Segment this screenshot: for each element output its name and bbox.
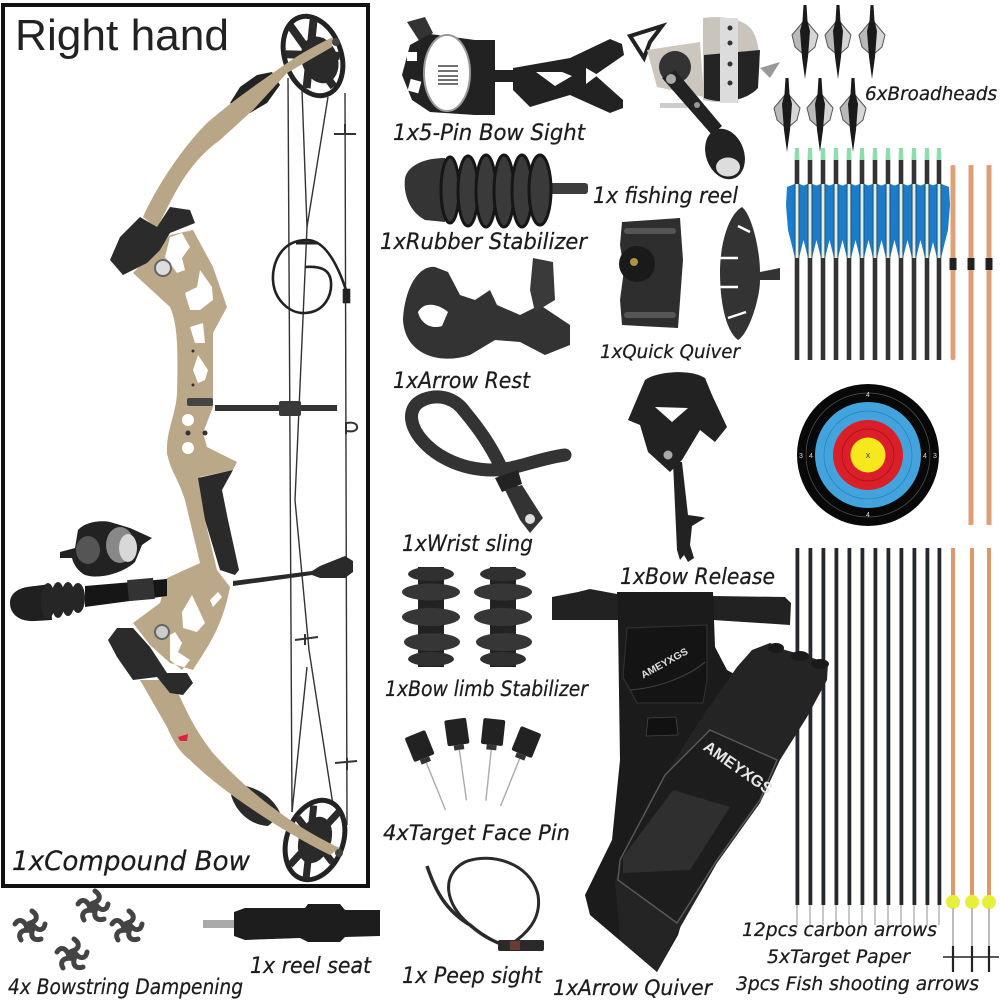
front stabilizer <box>85 579 167 607</box>
label: target paper: 5xTarget Paper <box>767 946 911 968</box>
shafts <box>794 148 942 360</box>
lower limb damper <box>231 786 281 826</box>
finger nubs <box>768 643 829 669</box>
icon: peep sight <box>427 858 544 951</box>
main bag <box>585 592 745 972</box>
label: wrist sling: 1xWrist sling <box>402 532 533 557</box>
label: arrow rest: 1xArrow Rest <box>393 369 531 394</box>
upper fish arrows <box>950 165 992 525</box>
label: fishing reel: 1x fishing reel <box>593 184 738 209</box>
label: compound bow: 1xCompound Bow <box>12 846 251 877</box>
lower fish arrows <box>943 548 999 972</box>
label: quick quiver: 1xQuick Quiver <box>600 341 741 363</box>
riser <box>133 230 237 670</box>
icon: bow release <box>628 372 727 562</box>
label: rubber stabilizer: 1xRubber Stabilizer <box>380 230 589 255</box>
upper limb <box>143 37 333 228</box>
icon: arrow quiver <box>552 589 829 972</box>
label: peep sight: 1x Peep sight <box>402 964 543 989</box>
label: arrow quiver: 1xArrow Quiver <box>553 976 713 1000</box>
label: bowstring dampening: 4x Bowstring Dampening <box>8 975 243 999</box>
icon: arrow quiver: AMEYXGS <box>639 646 690 681</box>
belt pouch <box>623 625 707 703</box>
label: reel seat: 1x reel seat <box>250 954 372 979</box>
peep tube on string <box>273 240 349 313</box>
cresting <box>797 184 939 258</box>
label: target face pin: 4xTarget Face Pin <box>383 821 570 845</box>
buckle <box>646 717 678 736</box>
icon: target paper: 4 <box>809 453 813 460</box>
upper carbon arrows <box>786 148 950 360</box>
icon: target paper: 4 <box>866 392 870 399</box>
icon: target paper: 4 <box>866 512 870 519</box>
lower limb pocket <box>108 628 193 695</box>
lower limb <box>140 680 340 855</box>
grip <box>198 470 239 575</box>
lower carbon arrows <box>796 548 941 925</box>
mesh pocket <box>623 790 730 873</box>
icon: target paper: 3 <box>933 453 937 460</box>
label: bow sight: 1x5-Pin Bow Sight <box>393 121 586 146</box>
front pocket <box>618 730 777 923</box>
icon: rubber stabilizer <box>405 155 588 227</box>
icon: target paper: 4 <box>923 453 927 460</box>
tube <box>615 643 828 972</box>
lower cam <box>275 792 355 888</box>
icon: target face pins <box>405 718 541 814</box>
icon: reel seat <box>203 904 380 942</box>
string nocks <box>295 124 357 770</box>
panel: compound bow frame <box>3 5 368 886</box>
strings <box>288 78 347 825</box>
label: carbon arrows: 12pcs carbon arrows <box>742 919 937 941</box>
icon: target paper: X <box>866 453 871 460</box>
belt <box>552 589 791 625</box>
icon: wrist sling <box>412 397 565 533</box>
icon: bowstring dampeners <box>15 891 142 968</box>
icon: 5-pin bow sight <box>402 17 624 115</box>
sight bar <box>187 398 213 406</box>
lower rear rod <box>233 556 353 586</box>
compound bow <box>10 8 355 888</box>
icon: target paper <box>797 384 939 526</box>
red mark <box>178 734 188 741</box>
label: bow release: 1xBow Release <box>620 565 775 590</box>
mounted reel <box>60 521 152 577</box>
cable rod with clamp <box>215 405 337 411</box>
icon: fishing reel <box>630 17 780 185</box>
label: broadheads: 6xBroadheads <box>865 83 997 105</box>
upper cam <box>273 8 353 104</box>
label: fish shooting arrows: 3pcs Fish shooting arrows <box>736 973 979 995</box>
upper limb damper <box>230 72 280 113</box>
icon: broadheads <box>774 5 885 152</box>
icon: arrow rest <box>403 258 570 359</box>
icon: arrow quiver: AMEYXGS <box>700 738 775 798</box>
upper limb pocket <box>110 207 195 275</box>
icon: bow limb stabilizers <box>402 567 532 667</box>
heading: right hand: Right hand <box>15 11 229 60</box>
label: limb stabilizer: 1xBow limb Stabilizer <box>385 677 589 701</box>
icon: quick quiver <box>619 207 780 340</box>
blue fletching <box>786 183 950 258</box>
icon: target paper: 3 <box>799 453 803 460</box>
